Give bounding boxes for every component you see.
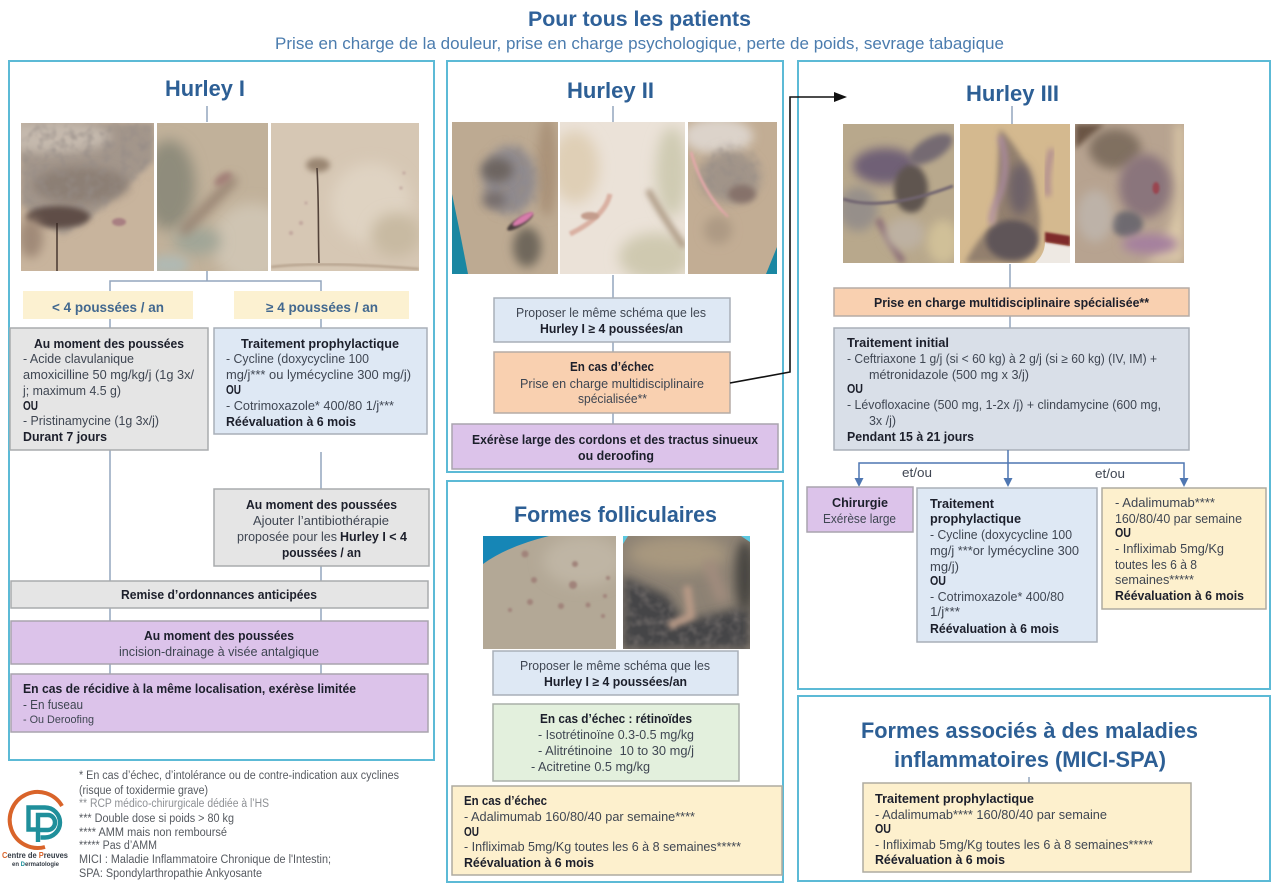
box: add antibiotics during flares: poussées / an xyxy=(282,546,361,560)
box: add antibiotics during flares: Hurley I < 4 xyxy=(340,530,407,544)
box: treatment during flares: OU xyxy=(23,399,38,413)
logo: Centre de Preuves en Dermatologie: Centre de Preuves xyxy=(2,850,68,860)
box: prophylactic treatment: Traitement prophylactique xyxy=(241,337,399,351)
box: initial treatment: 3x /j) xyxy=(869,414,896,428)
panel: Hurley I xyxy=(0,61,434,760)
box: advance prescriptions: Remise d’ordonnances anticipées xyxy=(121,588,317,602)
box: add antibiotics during flares xyxy=(214,489,429,566)
box: treatment during flares: - Pristinamycine (1g 3x/j) xyxy=(23,414,159,428)
box: prophylactic treatment: - Cotrimoxazole* 400/80 xyxy=(930,590,1064,604)
box: treatment during flares: - Acide clavulanique xyxy=(23,352,134,366)
footnotes: MICI : Maladie Inflammatoire Chronique de l'Intestin; xyxy=(79,854,331,866)
footnotes: **** AMM mais non remboursé xyxy=(79,827,227,839)
label: 4 or more flares: ≥ 4 poussées / an xyxy=(266,300,378,315)
footnotes: ***** Pas d’AMM xyxy=(79,840,157,852)
box: multidisciplinary care xyxy=(834,288,1189,316)
box: biologics: 160/80/40 par semaine xyxy=(1115,512,1242,526)
photo: Hurley I buttocks xyxy=(271,123,419,271)
box: incision-drainage: Au moment des poussées xyxy=(144,629,294,643)
arrows: treatment branches xyxy=(854,450,1188,487)
panel: Hurley II xyxy=(447,61,783,472)
box: initial treatment: Traitement initial xyxy=(847,336,949,350)
panel: Hurley III xyxy=(798,61,1270,689)
footnotes: *** Double dose si poids > 80 kg xyxy=(79,813,234,825)
box: prophylactic treatment: mg/j) xyxy=(930,560,959,574)
box: retinoids on failure: - Alitrétinoine 10 to 30 mg/j xyxy=(538,744,694,758)
footnotes xyxy=(79,770,399,880)
box: biologics: OU xyxy=(1115,526,1131,540)
box: limited excision xyxy=(11,674,428,732)
label: fewer than 4 flares: < 4 poussées / an xyxy=(52,300,164,315)
box: retinoids on failure: - Acitretine 0.5 mg/kg xyxy=(531,760,650,774)
box: initial treatment: OU xyxy=(847,382,863,396)
box: limited excision: - En fuseau xyxy=(23,698,83,712)
footnotes: ** RCP médico-chirurgicale dédiée à l’HS xyxy=(79,798,269,810)
box: biologics on failure: Réévaluation à 6 mois xyxy=(464,856,594,870)
box: surgery: Exérèse large xyxy=(823,512,896,526)
connector xyxy=(1028,777,1030,783)
box: biologics on failure xyxy=(452,786,782,875)
box: prophylactic treatment xyxy=(214,328,427,434)
photo: Hurley II left axilla xyxy=(452,122,558,274)
heading: Hurley I: Hurley I xyxy=(165,76,245,101)
box: add antibiotics during flares: Ajouter l’antibiothérapie xyxy=(253,514,389,528)
box: initial treatment: métronidazole (500 mg x 3/j) xyxy=(869,368,1029,382)
box: biologics on failure: - Adalimumab 160/80/40 par semaine**** xyxy=(464,810,695,824)
box: wide excision: Exérèse large des cordons et des tractus sinueux xyxy=(472,433,758,447)
box: retinoids on failure xyxy=(493,704,739,781)
box: initial treatment: - Lévofloxacine (500 mg, 1-2x /j) + clindamycine (600 mg, xyxy=(847,398,1161,412)
box: prophylactic treatment: - Cotrimoxazole* 400/80 1/j*** xyxy=(226,399,394,413)
photo: Hurley II chest xyxy=(560,122,685,274)
footnotes: (risque of toxidermie grave) xyxy=(79,785,208,797)
box: biologics on failure: - Infliximab 5mg/Kg toutes les 6 à 8 semaines***** xyxy=(464,840,741,854)
box: multidisciplinary care: Prise en charge multidisciplinaire spécialisée** xyxy=(874,296,1149,310)
arrow: Hurley II to Hurley III xyxy=(730,92,847,383)
photo: Hurley III buttock fold xyxy=(960,124,1070,263)
box: prophylactic treatment: - Cycline (doxycycline 100 xyxy=(930,528,1072,542)
box: prophylactic treatment: - Adalimumab**** 160/80/40 par semaine xyxy=(875,808,1107,822)
connectors xyxy=(612,106,614,424)
title: Pour tous les patients xyxy=(528,8,751,31)
panel: Formes folliculaires xyxy=(447,481,783,882)
photo: Hurley I groin xyxy=(21,123,154,271)
photo: back with follicular lesions xyxy=(483,536,616,649)
photo: Hurley III perineum xyxy=(1075,124,1184,263)
heading: Formes folliculaires: Formes folliculaires xyxy=(514,502,717,527)
box: same scheme as Hurley I: Hurley I ≥ 4 poussées/an xyxy=(540,322,683,336)
box: biologics on failure: En cas d’échec xyxy=(464,794,547,808)
logo: Centre de Preuves en Dermatologie xyxy=(2,792,68,868)
label: fewer than 4 flares xyxy=(23,291,193,319)
box: prophylactic treatment: OU xyxy=(930,574,946,588)
box: on failure, multidisciplinary care: spécialisée** xyxy=(578,392,647,406)
box: limited excision: En cas de récidive à la même localisation, exérèse limitée xyxy=(23,682,356,696)
box: wide excision xyxy=(452,424,778,469)
box: treatment during flares xyxy=(10,328,208,450)
box: biologics: toutes les 6 à 8 xyxy=(1115,558,1197,572)
box: prophylactic treatment: Réévaluation à 6 mois xyxy=(226,415,356,429)
title xyxy=(275,8,1004,53)
box: on failure, multidisciplinary care xyxy=(494,352,730,413)
box: limited excision: - Ou Deroofing xyxy=(23,714,94,726)
box: incision-drainage xyxy=(11,621,428,664)
heading: Hurley III: Hurley III xyxy=(966,81,1059,106)
box: prophylactic treatment: Réévaluation à 6 mois xyxy=(875,853,1005,867)
box: treatment during flares: amoxicilline 50 mg/kg/j (1g 3x/ xyxy=(23,368,195,382)
subtitle: Prise en charge de la douleur, prise en charge psychologique, perte de poids, sevrage tabagique xyxy=(275,35,1004,53)
box: prophylactic treatment: Traitement xyxy=(930,497,995,511)
box: same scheme as Hurley I: Hurley I ≥ 4 poussées/an xyxy=(544,675,687,689)
box: prophylactic treatment: - Infliximab 5mg/Kg toutes les 6 à 8 semaines***** xyxy=(875,838,1153,852)
box: retinoids on failure: - Isotrétinoïne 0.3-0.5 mg/kg xyxy=(538,728,694,742)
box: prophylactic treatment xyxy=(917,488,1097,642)
box: prophylactic treatment: mg/j ***or lymécycline 300 xyxy=(930,544,1079,558)
connectors xyxy=(110,106,321,674)
heading: Hurley II: Hurley II xyxy=(567,78,654,103)
box: incision-drainage: incision-drainage à visée antalgique xyxy=(119,645,319,659)
box: prophylactic treatment: mg/j*** ou lymécycline 300 mg/j) xyxy=(226,368,411,382)
footnotes: * En cas d’échec, d’intolérance ou de contre-indication aux cyclines xyxy=(79,770,399,782)
box: surgery: Chirurgie xyxy=(832,496,888,510)
box: same scheme as Hurley I: Proposer le même schéma que les xyxy=(520,659,710,673)
box: add antibiotics during flares: Au moment des poussées xyxy=(246,498,397,512)
box: add antibiotics during flares: proposée pour les xyxy=(237,530,337,544)
box: wide excision: ou deroofing xyxy=(578,449,654,463)
box: on failure, multidisciplinary care: En cas d’échec xyxy=(570,360,654,374)
box: initial treatment: Pendant 15 à 21 jours xyxy=(847,430,974,444)
label: 4 or more flares xyxy=(234,291,409,319)
photo: Hurley II right axilla xyxy=(688,122,777,274)
box: surgery xyxy=(807,487,913,532)
box: treatment during flares: Au moment des poussées xyxy=(34,337,184,351)
footnotes: SPA: Spondylarthropathie Ankyosante xyxy=(79,868,262,880)
box: biologics xyxy=(1102,488,1266,609)
box: initial treatment: - Ceftriaxone 1 g/j (si < 60 kg) à 2 g/j (si ≥ 60 kg) (IV, IM) + xyxy=(847,352,1157,366)
box: treatment during flares: Durant 7 jours xyxy=(23,430,107,444)
box: prophylactic treatment: Réévaluation à 6 mois xyxy=(930,622,1059,636)
photo: Hurley I axilla xyxy=(157,123,268,271)
box: initial treatment xyxy=(834,328,1189,450)
connectors xyxy=(1010,106,1012,328)
heading: associated inflammatory diseases xyxy=(861,718,1198,772)
box: retinoids on failure: En cas d’échec : rétinoïdes xyxy=(540,712,692,726)
box: biologics: - Adalimumab**** xyxy=(1115,496,1215,510)
photo: Hurley III groin xyxy=(843,124,954,263)
box: advance prescriptions xyxy=(11,581,428,608)
photo: scalp with follicular lesions xyxy=(623,536,750,649)
box: on failure, multidisciplinary care: Prise en charge multidisciplinaire xyxy=(520,377,704,391)
box: biologics on failure: OU xyxy=(464,825,479,839)
box: same scheme as Hurley I: Proposer le même schéma que les xyxy=(516,306,706,320)
box: prophylactic treatment: - Cycline (doxycycline 100 xyxy=(226,352,369,366)
box: prophylactic treatment: Traitement prophylactique xyxy=(875,792,1034,806)
logo: Centre de Preuves en Dermatologie: en Dermatologie xyxy=(12,862,60,868)
box: prophylactic treatment: 1/j*** xyxy=(930,605,960,619)
box: prophylactic treatment: prophylactique xyxy=(930,512,1021,526)
heading: associated inflammatory diseases: Formes associés à des maladies xyxy=(861,718,1198,743)
label: and/or right: et/ou xyxy=(1095,467,1125,481)
box: biologics: - Infliximab 5mg/Kg xyxy=(1115,542,1224,556)
box: prophylactic treatment xyxy=(863,783,1191,872)
box: biologics: Réévaluation à 6 mois xyxy=(1115,589,1244,603)
box: treatment during flares: j; maximum 4.5 g) xyxy=(22,384,121,398)
box: biologics: semaines***** xyxy=(1115,573,1194,587)
heading: associated inflammatory diseases: inflammatoires (MICI-SPA) xyxy=(894,747,1166,772)
box: same scheme as Hurley I xyxy=(493,651,738,695)
box: same scheme as Hurley I xyxy=(494,298,730,342)
label: and/or left: et/ou xyxy=(902,466,932,480)
box: prophylactic treatment: OU xyxy=(875,822,891,836)
box: prophylactic treatment: OU xyxy=(226,383,241,397)
panel: Formes associées xyxy=(798,696,1270,881)
